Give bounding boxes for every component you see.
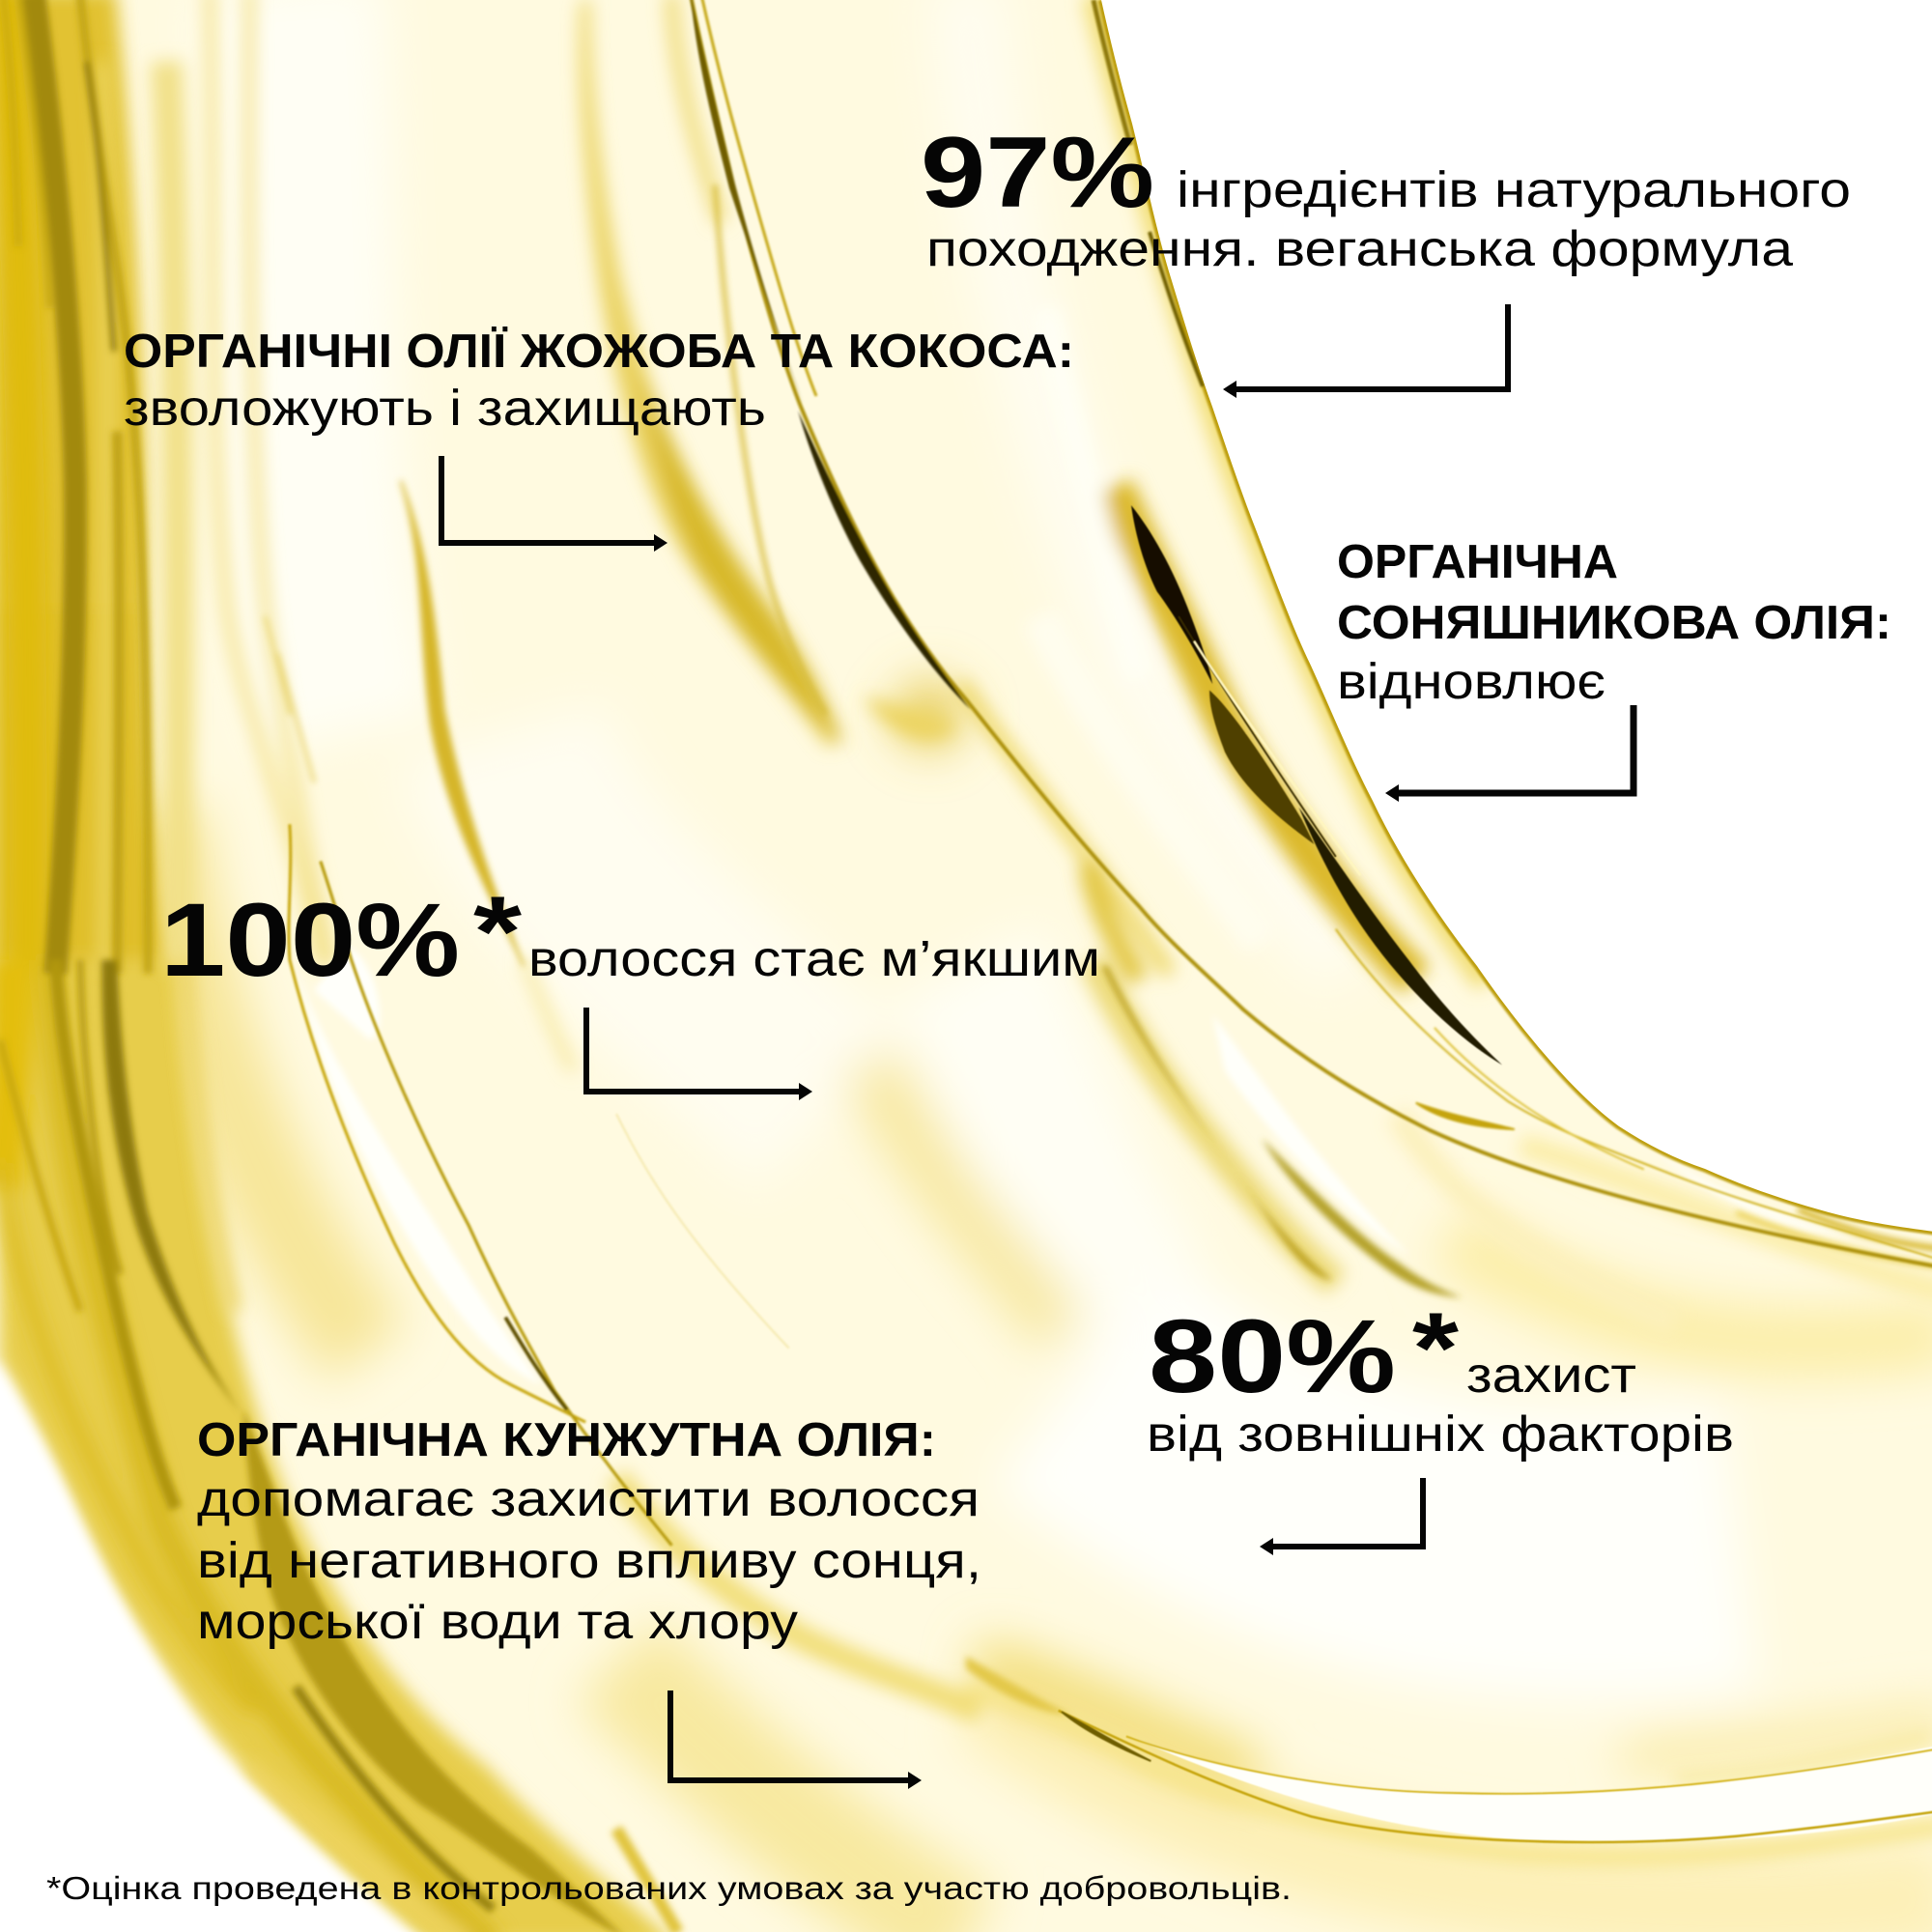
- block: sesame oil: ОРГАНІЧНА КУНЖУТНА ОЛІЯ:: [197, 1414, 936, 1466]
- block: 97% natural: 97%: [921, 117, 1154, 229]
- block: 80% protection: захист: [1466, 1348, 1636, 1404]
- soft lower-left edge: [0, 1342, 432, 1932]
- dark eye: [1131, 505, 1502, 1065]
- block: sunflower oil: [1337, 536, 1891, 710]
- block: 97% natural: походження. веганська формула: [926, 221, 1793, 277]
- block: sesame oil: допомагає захистити волосся: [197, 1471, 980, 1527]
- footnote: *Оцінка проведена в контрольованих умовах за участю добровольців.: [46, 1870, 1292, 1906]
- block: jojoba and coconut oils: ОРГАНІЧНІ ОЛІЇ ЖОЖОБА ТА КОКОСА:: [124, 326, 1074, 378]
- block: 80% protection: від зовнішніх факторів: [1147, 1406, 1734, 1463]
- crisp lines: [289, 0, 1932, 1546]
- block: jojoba and coconut oils: зволожують і захищають: [124, 381, 766, 437]
- block: 100% softer hair: 100%: [160, 881, 460, 998]
- crescent: [1059, 1711, 1932, 1842]
- block: sesame oil: морської води та хлору: [197, 1594, 798, 1650]
- arrow: 97%: [1223, 304, 1508, 398]
- left golden mass: [0, 0, 678, 1932]
- block: 80% protection: [1147, 1293, 1734, 1463]
- arrow: sunflower: [1385, 705, 1634, 802]
- block: sunflower oil: ОРГАНІЧНА: [1337, 536, 1618, 588]
- block: sunflower oil: СОНЯШНИКОВА ОЛІЯ:: [1337, 597, 1891, 649]
- block: 100% softer hair: волосся стає м’якшим: [528, 931, 1100, 987]
- arrow: jojoba: [441, 456, 668, 552]
- block: 97% natural: інгредієнтів натурального: [1177, 162, 1851, 218]
- arrow: sesame: [670, 1690, 922, 1789]
- block: jojoba and coconut oils: [124, 326, 1074, 437]
- silhouette edge line: [1101, 0, 1932, 1233]
- block: 97% natural: [921, 117, 1851, 277]
- arrow: 80%: [1260, 1478, 1423, 1555]
- block: sesame oil: [197, 1414, 981, 1650]
- main long line: [690, 0, 1932, 1267]
- block: 80% protection: 80%: [1149, 1297, 1396, 1414]
- block: 100% softer hair: [160, 876, 1100, 998]
- white streaks: [296, 948, 1854, 1385]
- block: sesame oil: від негативного впливу сонця,: [197, 1533, 981, 1589]
- arrow: 100%: [586, 1008, 812, 1100]
- block: 80% protection: *: [1412, 1293, 1460, 1405]
- block: 100% softer hair: *: [473, 876, 523, 988]
- block: sunflower oil: відновлює: [1337, 654, 1605, 710]
